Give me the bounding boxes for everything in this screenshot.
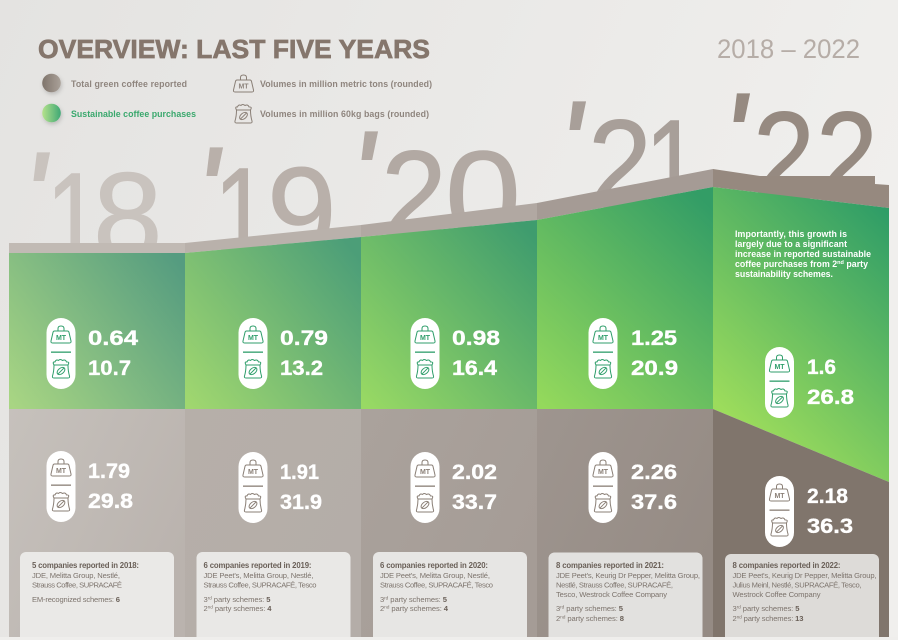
sustainable values 2018: 0.64 — [88, 327, 138, 350]
legend: total green coffee: Total green coffee reported — [71, 79, 187, 89]
legend: sustainable coffee: Sustainable coffee purchases — [71, 109, 196, 119]
card 2020: 6 companies reported in 2020: — [380, 561, 488, 570]
sustainable values 2018: MT — [56, 335, 67, 342]
sustainable values 2021 — [588, 318, 678, 389]
total values 2019: 31.9 — [280, 491, 322, 514]
card 2021: 8 companies reported in 2021: — [556, 561, 664, 570]
card 2018: EM-recognized schemes: 6 — [32, 595, 120, 604]
year label 2019: 9 — [267, 143, 337, 282]
card 2021: Nestlé, Strauss Coffee, SUPRACAFÉ, — [556, 580, 673, 590]
card 2020: party schemes: — [389, 604, 444, 613]
year label 2021: ' — [561, 79, 586, 202]
year label 2018 — [25, 130, 163, 287]
title: OVERVIEW: LAST FIVE YEARS — [38, 34, 430, 64]
card 2021: party schemes: — [564, 604, 619, 613]
band 2021 — [537, 169, 713, 220]
callout text 2022: largely due to a significant — [735, 239, 847, 249]
card 2019: party schemes: — [212, 595, 266, 604]
callout text 2022: party — [844, 259, 868, 269]
year label 2018: ' — [25, 130, 50, 253]
card 2022: 3 — [732, 604, 737, 613]
green panel 2021 — [537, 187, 713, 409]
total values 2018: 29.8 — [88, 490, 133, 513]
card 2019: party schemes: — [213, 604, 267, 613]
legend: 60kg bags: Volumes in million 60kg bags (rounded) — [260, 109, 429, 119]
total values 2022: MT — [774, 493, 785, 500]
year label 2020 — [353, 109, 521, 265]
year label 2019 — [198, 125, 337, 282]
sustainable values 2020 — [410, 318, 500, 389]
card 2022: 2 — [732, 614, 737, 623]
card 2021: 8 — [620, 614, 624, 623]
total values 2018: 1.79 — [88, 460, 130, 483]
card 2018: Strauss Coffee, SUPRACAFÉ — [32, 580, 122, 590]
year label 2022: 2 — [816, 87, 878, 226]
total values 2019: MT — [248, 469, 259, 476]
column: 2022 — [713, 71, 889, 640]
card 2020: JDE Peet's, Melitta Group, Nestlé, — [380, 571, 490, 580]
sustainable values 2021: 20.9 — [631, 357, 678, 380]
card 2018 — [20, 552, 174, 640]
year label 2022: ' — [725, 71, 750, 194]
year label 2020: ' — [353, 109, 378, 232]
card 2022: 8 companies reported in 2022: — [732, 561, 840, 570]
card 2019: JDE Peet's, Melitta Group, Nestlé, — [204, 571, 314, 580]
card 2022 — [725, 554, 879, 640]
grey panel 2020 — [361, 409, 537, 640]
total values 2022: 36.3 — [807, 515, 853, 538]
total values 2020: 33.7 — [452, 491, 497, 514]
card 2022: nd — [737, 614, 742, 620]
legend: sustainable coffee — [42, 104, 196, 122]
sustainable values 2021: 1.25 — [631, 327, 677, 350]
card 2021: party schemes: — [565, 614, 620, 623]
total values 2021 — [588, 452, 677, 523]
year label 2022 — [725, 71, 878, 226]
legend: metric tons: MT — [238, 84, 249, 90]
green panel 2018 — [9, 253, 185, 409]
sustainable values 2020: MT — [420, 335, 431, 342]
sustainable values 2020: 0.98 — [452, 327, 500, 350]
card 2021: 2 — [556, 614, 560, 623]
sustainable values 2021: MT — [598, 335, 609, 342]
sustainable values 2019: 0.79 — [280, 327, 328, 350]
card 2018: JDE, Melitta Group, Nestlé, — [32, 571, 120, 580]
total values 2021: 37.6 — [631, 491, 677, 514]
total values 2020 — [410, 452, 497, 523]
sustainable values 2019: 13.2 — [280, 357, 323, 380]
card 2022: party schemes: — [741, 604, 795, 613]
card 2021: 5 — [619, 604, 624, 613]
card 2020: nd — [384, 604, 390, 610]
card 2019: nd — [208, 604, 213, 610]
sustainable values 2020: 16.4 — [452, 357, 497, 380]
grey panel 2021 — [537, 409, 713, 640]
year label 2021 — [561, 79, 700, 234]
column: 2020 — [353, 109, 537, 640]
year label 2019: 1 — [214, 143, 269, 282]
sustainable values 2018: 10.7 — [88, 357, 131, 380]
card 2019: 4 — [267, 604, 272, 613]
column: 2018 — [9, 130, 185, 640]
card 2019: Strauss Coffee, SUPRACAFÉ, Tesco — [204, 580, 316, 590]
total values 2020: 2.02 — [452, 461, 497, 484]
date range: 2018 – 2022 — [717, 34, 860, 64]
sustainable values 2022: 26.8 — [807, 386, 854, 409]
green panel 2019 — [185, 237, 361, 409]
year label 2021: 1 — [645, 95, 700, 234]
card 2020: rd — [384, 596, 389, 602]
sustainable values 2022 — [765, 347, 854, 418]
total values 2019: 1.91 — [280, 461, 319, 484]
card 2020: 2 — [380, 604, 384, 613]
card 2021 — [548, 552, 702, 640]
card 2019: 3 — [204, 595, 208, 604]
legend: total green coffee — [42, 74, 187, 92]
card 2019: 6 companies reported in 2019: — [204, 561, 312, 570]
callout text 2022: nd — [837, 260, 844, 266]
callout text 2022: sustainability schemes. — [735, 269, 833, 279]
green panel 2022 — [713, 187, 889, 482]
card 2022: rd — [737, 604, 741, 610]
total values 2018 — [46, 451, 133, 522]
card 2019 — [196, 552, 350, 640]
column: 2021 — [537, 79, 713, 640]
card 2020: 5 — [443, 595, 448, 604]
card 2020: 4 — [444, 604, 449, 613]
year label 2018: 1 — [46, 148, 101, 287]
year label 2018: 8 — [93, 148, 163, 287]
band 2020 — [361, 203, 537, 237]
card 2020 — [373, 552, 527, 640]
card 2021: Tesco, Westrock Coffee Company — [556, 590, 667, 599]
callout text 2022: Importantly, this growth is — [735, 229, 847, 239]
green panel 2020 — [361, 220, 537, 409]
legend: 60kg bags — [235, 104, 429, 123]
legend — [42, 74, 432, 123]
total values 2019 — [238, 452, 322, 523]
grey panel 2022 — [713, 409, 889, 640]
callout text 2022: coffee purchases from 2 — [735, 259, 837, 269]
sustainable values 2019 — [238, 318, 328, 389]
total values 2022: 2.18 — [807, 485, 848, 508]
total values 2022 — [765, 476, 853, 547]
total values 2021: 2.26 — [631, 461, 677, 484]
total values 2021: MT — [598, 469, 609, 476]
callout text 2022 — [735, 229, 871, 279]
grey panel 2018 — [9, 409, 185, 640]
card 2022: party schemes: — [742, 614, 795, 623]
sustainable values 2022: 1.6 — [807, 356, 836, 379]
sustainable values 2022: MT — [774, 364, 785, 371]
band 2022 — [713, 169, 889, 208]
sustainable values 2018 — [46, 318, 138, 389]
card 2020: party schemes: — [388, 595, 443, 604]
legend: metric tons: Volumes in million metric tons (rounded) — [260, 79, 432, 89]
card 2021: rd — [560, 604, 565, 610]
card 2022: Julius Meinl, Nestlé, SUPRACAFÉ, Tesco, — [732, 580, 862, 590]
year label 2020: 0 — [445, 126, 521, 265]
card 2020: 3 — [380, 595, 384, 604]
total values 2020: MT — [420, 469, 431, 476]
card 2019: 5 — [266, 595, 271, 604]
total values 2018: MT — [56, 468, 67, 475]
card 2018: 5 companies reported in 2018: — [32, 561, 139, 570]
column: 2019 — [185, 125, 361, 640]
band 2019 — [185, 225, 361, 253]
card 2021: nd — [560, 614, 566, 620]
grey panel 2019 — [185, 409, 361, 640]
card 2022: 5 — [795, 604, 800, 613]
card 2020: Strauss Coffee, SUPRACAFÉ, Tesco — [380, 580, 493, 590]
legend: metric tons — [233, 75, 432, 92]
card 2021: 3 — [556, 604, 560, 613]
card 2022: Westrock Coffee Company — [732, 590, 821, 599]
year label 2020: 2 — [381, 126, 447, 265]
card 2019: rd — [208, 596, 212, 602]
sustainable values 2019: MT — [248, 335, 259, 342]
year label 2021: 2 — [588, 95, 652, 234]
card 2022: 13 — [795, 614, 804, 623]
year label 2019: ' — [198, 125, 223, 248]
card 2021: JDE Peet's, Keurig Dr Pepper, Melitta Group, — [556, 571, 700, 580]
band 2018 — [9, 243, 185, 253]
card 2019: 2 — [204, 604, 208, 613]
card 2022: JDE Peet's, Keurig Dr Pepper, Melitta Group, — [732, 571, 876, 580]
callout text 2022: increase in reported sustainable — [735, 249, 871, 259]
year label 2022: 2 — [753, 87, 815, 226]
